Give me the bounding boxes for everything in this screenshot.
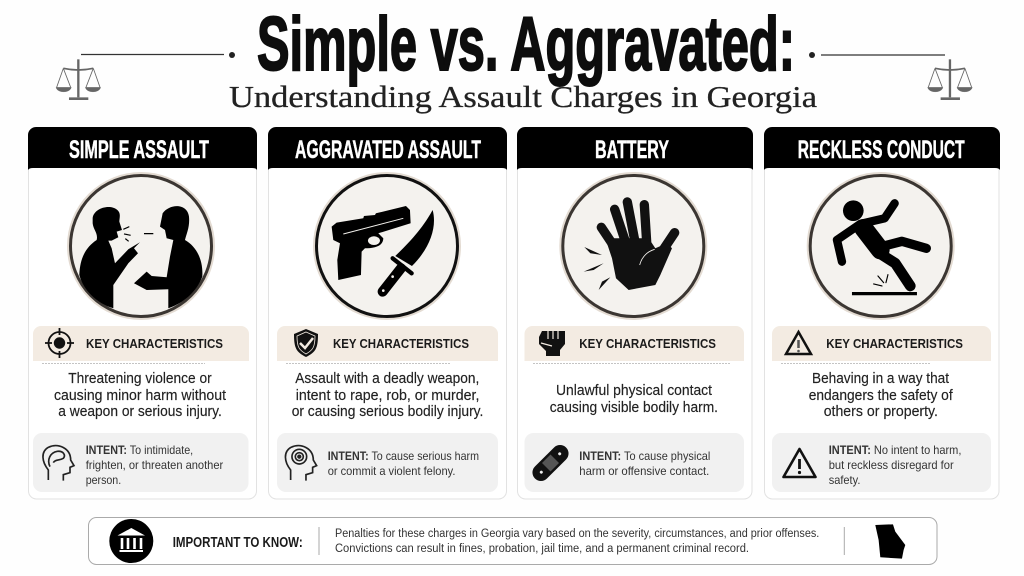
icon: left scales of justice [56, 59, 101, 99]
key characteristics band [33, 326, 249, 364]
panel: reckless conduct [764, 127, 1000, 499]
icon: courthouse [109, 519, 153, 563]
panel: important to know [88, 518, 937, 564]
header: simple assault: SIMPLE ASSAULT [69, 136, 209, 164]
intent box: or commit a violent felony. [328, 464, 455, 478]
header: simple assault [28, 127, 257, 170]
intent box: INTENT: To cause physical [579, 449, 710, 463]
intent box [277, 433, 498, 492]
icon: two men arguing [69, 174, 213, 318]
header: battery: BATTERY [595, 136, 669, 164]
icon: bandage [529, 441, 572, 485]
icon: shield with check [294, 329, 318, 357]
intent box [772, 433, 991, 492]
description: Assault with a deadly weapon, [295, 371, 479, 387]
intent box: safety. [829, 473, 860, 487]
right title ornament [809, 52, 945, 58]
intent box: but reckless disregard for [829, 458, 954, 472]
intent box [524, 433, 744, 492]
description [809, 371, 954, 420]
icon: falling person [809, 174, 953, 318]
intent box: harm or offensive contact. [579, 464, 709, 478]
description [292, 371, 483, 420]
penalties note: Penalties for these charges in Georgia vary based on the severity, circumstances, and prior offenses. [335, 528, 819, 540]
intent box: INTENT: To intimidate, [86, 443, 193, 457]
heading: important to know: IMPORTANT TO KNOW: [173, 535, 303, 551]
key characteristics band [524, 326, 744, 364]
penalties note [335, 528, 819, 555]
description: Threatening violence or [68, 371, 212, 387]
icon: right scales of justice [928, 59, 972, 99]
left title ornament [81, 52, 235, 58]
panel: aggravated assault [268, 127, 507, 499]
icon: Georgia state map [875, 524, 905, 559]
description [550, 383, 718, 416]
description: causing minor harm without [54, 388, 226, 404]
icon: target [45, 328, 74, 358]
key characteristics band: KEY CHARACTERISTICS [579, 336, 716, 351]
intent box [33, 433, 248, 492]
icon: raised hand with impact marks [561, 174, 705, 318]
intent box: person. [86, 473, 121, 487]
key characteristics band: KEY CHARACTERISTICS [826, 336, 963, 351]
description: intent to rape, rob, or murder, [296, 388, 479, 404]
description: causing visible bodily harm. [550, 400, 718, 416]
header: reckless conduct [764, 127, 1000, 170]
icon: warning triangle [786, 332, 811, 354]
header: battery [517, 127, 753, 170]
description: Behaving in a way that [812, 371, 949, 387]
icon: raised fist [539, 329, 565, 356]
panel: simple assault [28, 127, 257, 499]
key characteristics band: KEY CHARACTERISTICS [86, 336, 223, 351]
penalties note: Convictions can result in fines, probation, jail time, and a permanent criminal record. [335, 543, 749, 555]
description: Unlawful physical contact [556, 383, 712, 399]
subtitle: Understanding Assault Charges in Georgia [229, 79, 817, 114]
intent box: INTENT: To cause serious harm [328, 449, 479, 463]
key characteristics band [772, 326, 991, 364]
header: aggravated assault [268, 127, 507, 170]
panel: battery [517, 127, 753, 499]
description: a weapon or serious injury. [58, 404, 222, 420]
description [54, 371, 226, 420]
icon: warning sign [784, 449, 816, 477]
icon: pistol and knife [315, 174, 459, 318]
icon: head with target [285, 446, 317, 481]
key characteristics band: KEY CHARACTERISTICS [333, 336, 469, 351]
key characteristics band [277, 326, 498, 364]
header: aggravated assault: AGGRAVATED ASSAULT [295, 136, 481, 164]
description: or causing serious bodily injury. [292, 404, 483, 420]
icon: head with brain [43, 446, 74, 481]
description: endangers the safety of [809, 388, 954, 404]
intent box: frighten, or threaten another [86, 458, 223, 472]
intent box: INTENT: No intent to harm, [829, 443, 961, 457]
description: others or property. [824, 404, 938, 420]
